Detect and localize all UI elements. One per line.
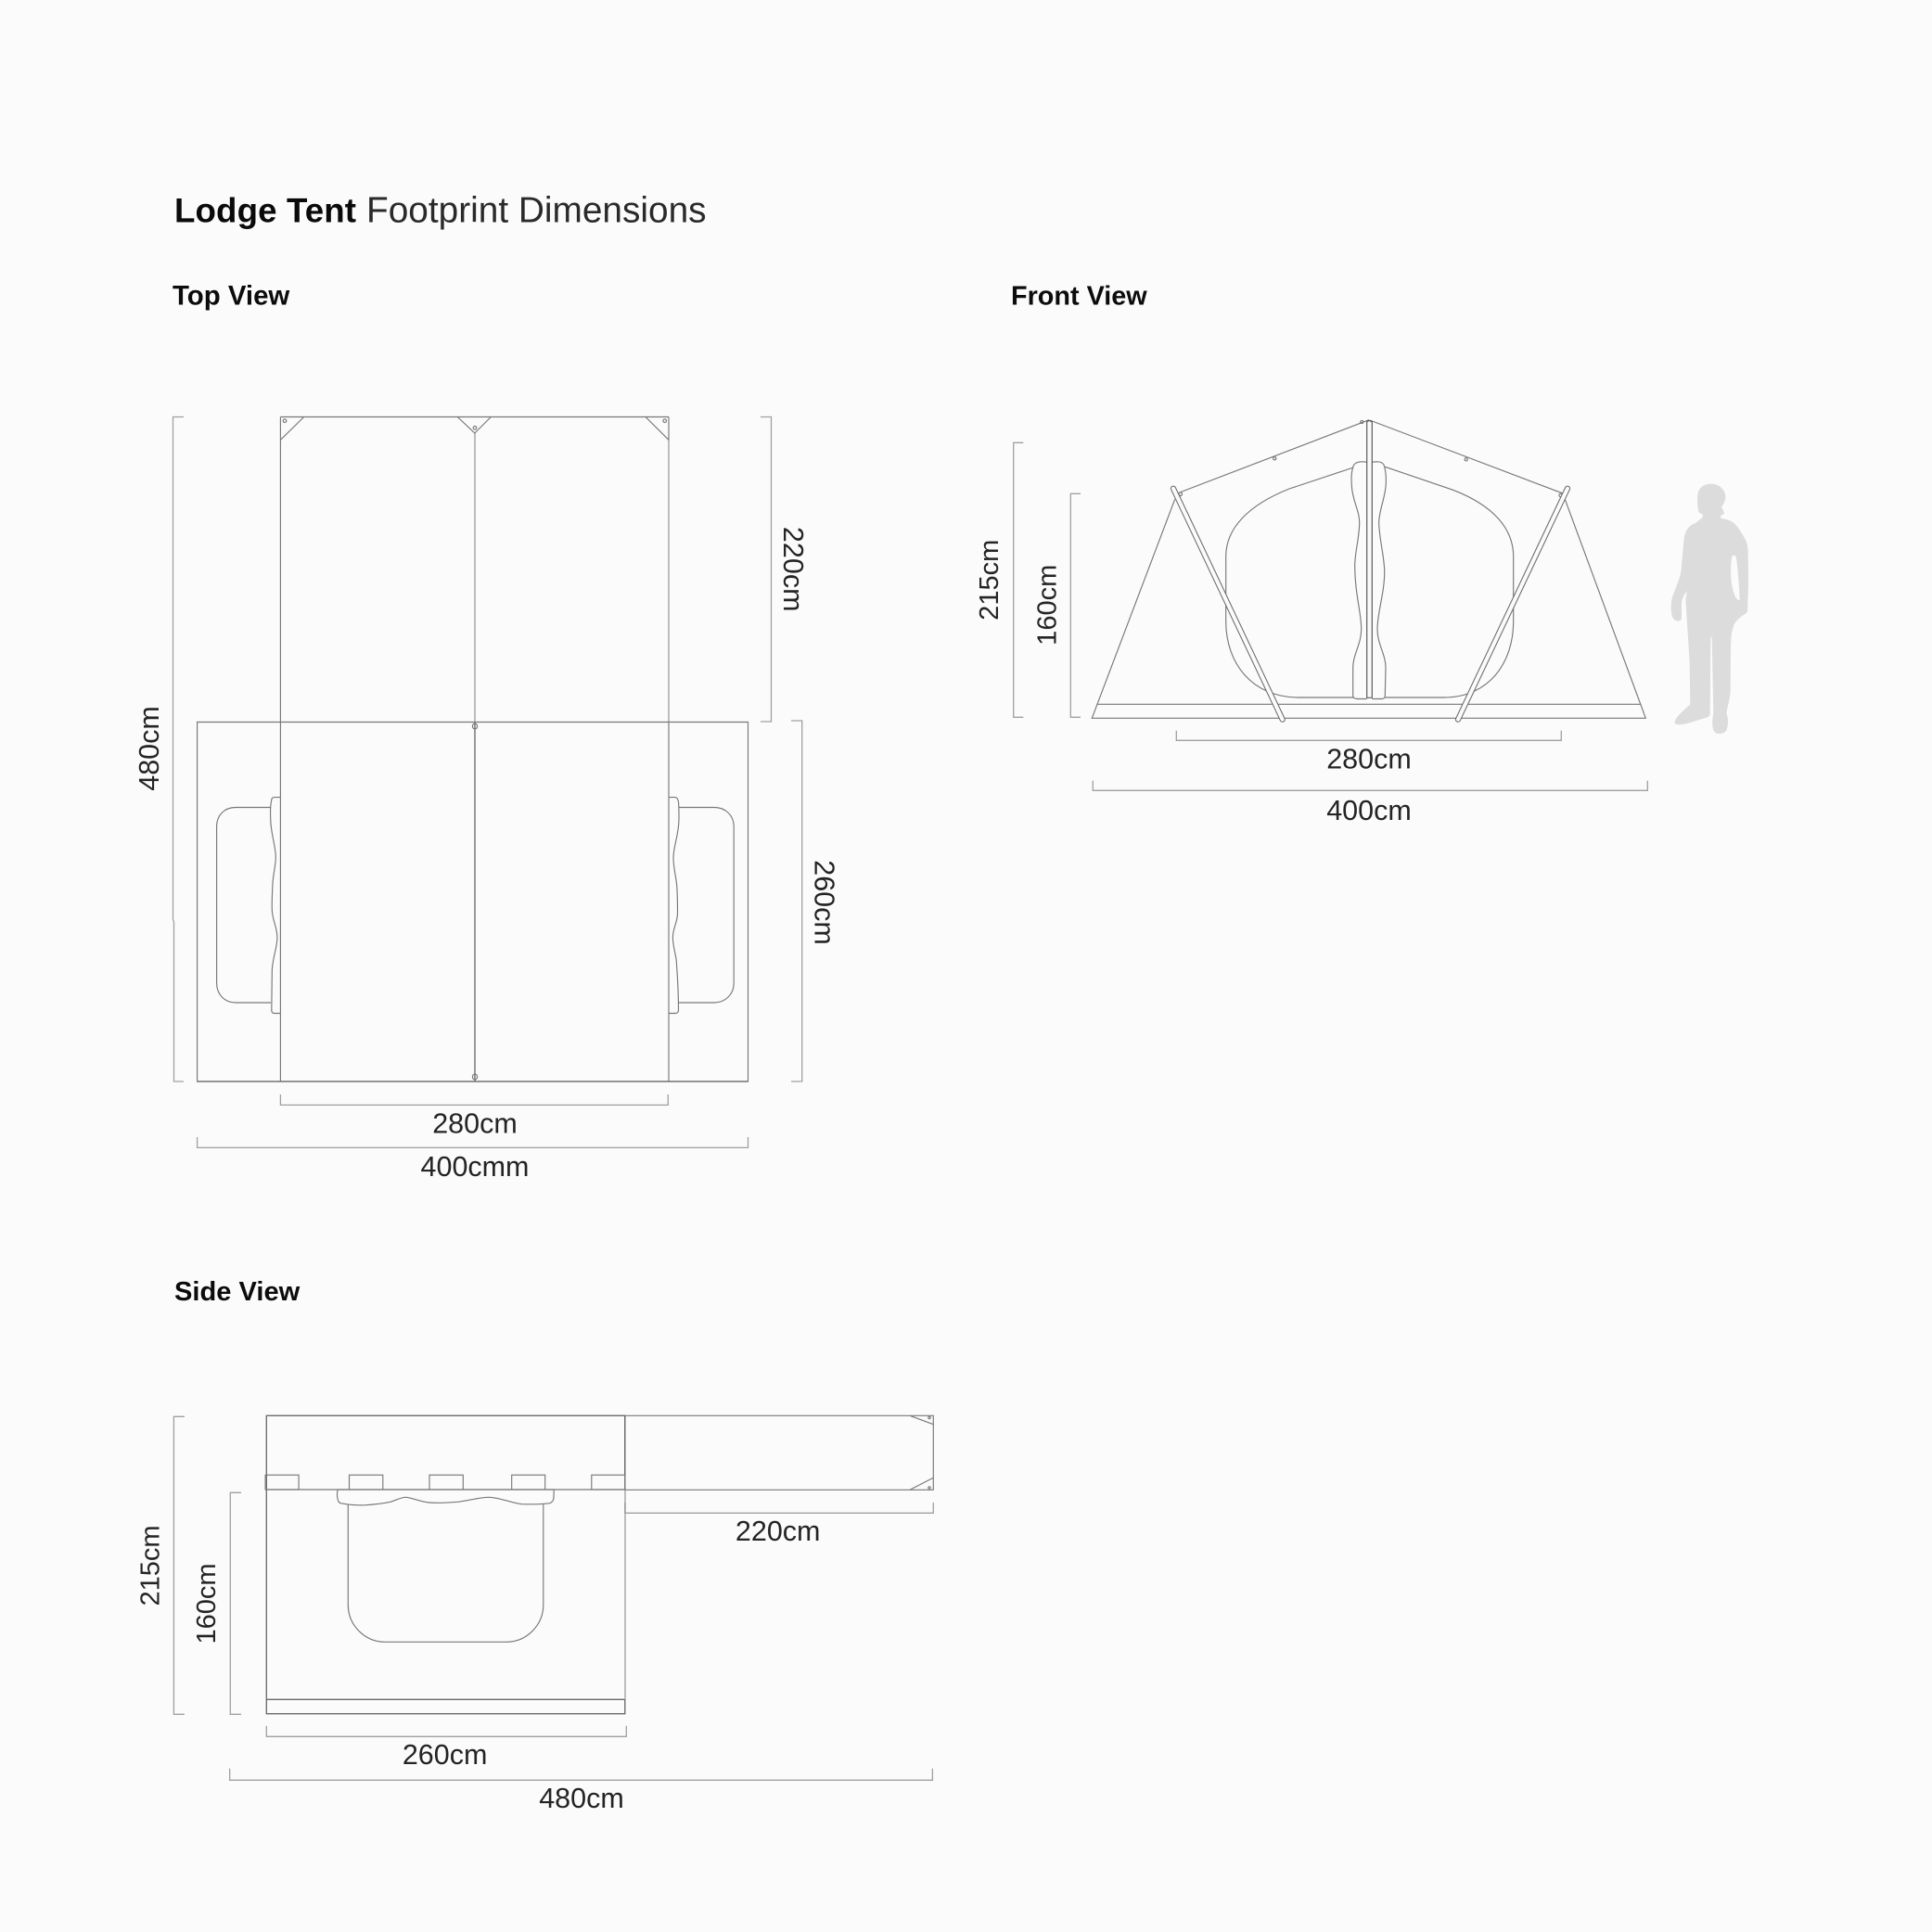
person silhouette for scale [1672, 485, 1747, 733]
centre curtains [1351, 462, 1386, 699]
dimension: 215cm [975, 442, 1023, 717]
heading: top view: Top View [173, 280, 289, 312]
dimension: 220cm: 220cm [736, 1516, 820, 1547]
heading: front view: Front View [1011, 282, 1147, 312]
dimension: 400cm [1093, 781, 1647, 826]
tent body [266, 1415, 625, 1714]
dimension: 280cm: 280cm [432, 1107, 518, 1139]
dimension: 400cm: 400cm [1326, 795, 1412, 826]
dimension: 480cm: 480cm [134, 706, 165, 791]
dimension: 280cm: 280cm [1326, 744, 1412, 775]
arm gap [1731, 556, 1740, 600]
dimension: 260cm: 260cm [809, 860, 840, 945]
door opening [348, 1504, 544, 1642]
dimension: 160cm: 160cm [1033, 565, 1063, 646]
left angled pole [1173, 489, 1283, 720]
dimension: 260cm: 260cm [403, 1739, 487, 1771]
panel: top view drawing [134, 417, 840, 1183]
dimension: 260cm [791, 721, 840, 1081]
right window and curtain [669, 798, 734, 1013]
dimension: 260cm [266, 1726, 626, 1771]
dimension: 280cm [280, 1094, 668, 1139]
dimension: 480cm [230, 1769, 932, 1814]
panel: front view drawing [975, 420, 1747, 826]
dimension: 480cm [134, 417, 184, 1081]
dimension: 220cm [761, 417, 809, 722]
door outlines [1226, 467, 1514, 697]
dimension: 400cmm: 400cmm [421, 1151, 529, 1183]
dimension: 480cm: 480cm [539, 1783, 624, 1814]
dimension: 160cm: 160cm [192, 1563, 222, 1644]
corner guy-line tabs and eyelets [280, 417, 669, 1080]
dimension: 220cm: 220cm [777, 527, 809, 611]
dimension: 215cm: 215cm [135, 1525, 165, 1606]
heading: side view: Side View [174, 1277, 301, 1307]
side walls and floor [1092, 499, 1645, 718]
centre pole [1367, 421, 1372, 697]
title: Footprint Dimensions [366, 191, 707, 230]
roof toggle boxes [265, 1475, 625, 1490]
dimension: 280cm [1176, 731, 1561, 775]
dimension: 215cm [135, 1416, 185, 1714]
dimension: 400cmm [198, 1137, 748, 1183]
dimension: 215cm: 215cm [975, 540, 1004, 621]
title: Lodge Tent [174, 191, 356, 230]
awning extension [625, 1415, 933, 1490]
roof lines and hooks [1179, 420, 1562, 497]
tent body outline [198, 417, 748, 1081]
rolled door curtain [337, 1490, 554, 1505]
right angled pole [1458, 489, 1567, 720]
dimension: 160cm [1033, 493, 1081, 717]
dimension: 220cm [625, 1503, 933, 1547]
left window and curtain [217, 798, 280, 1013]
panel: side view drawing [135, 1415, 933, 1814]
dimension: 160cm [192, 1492, 241, 1714]
